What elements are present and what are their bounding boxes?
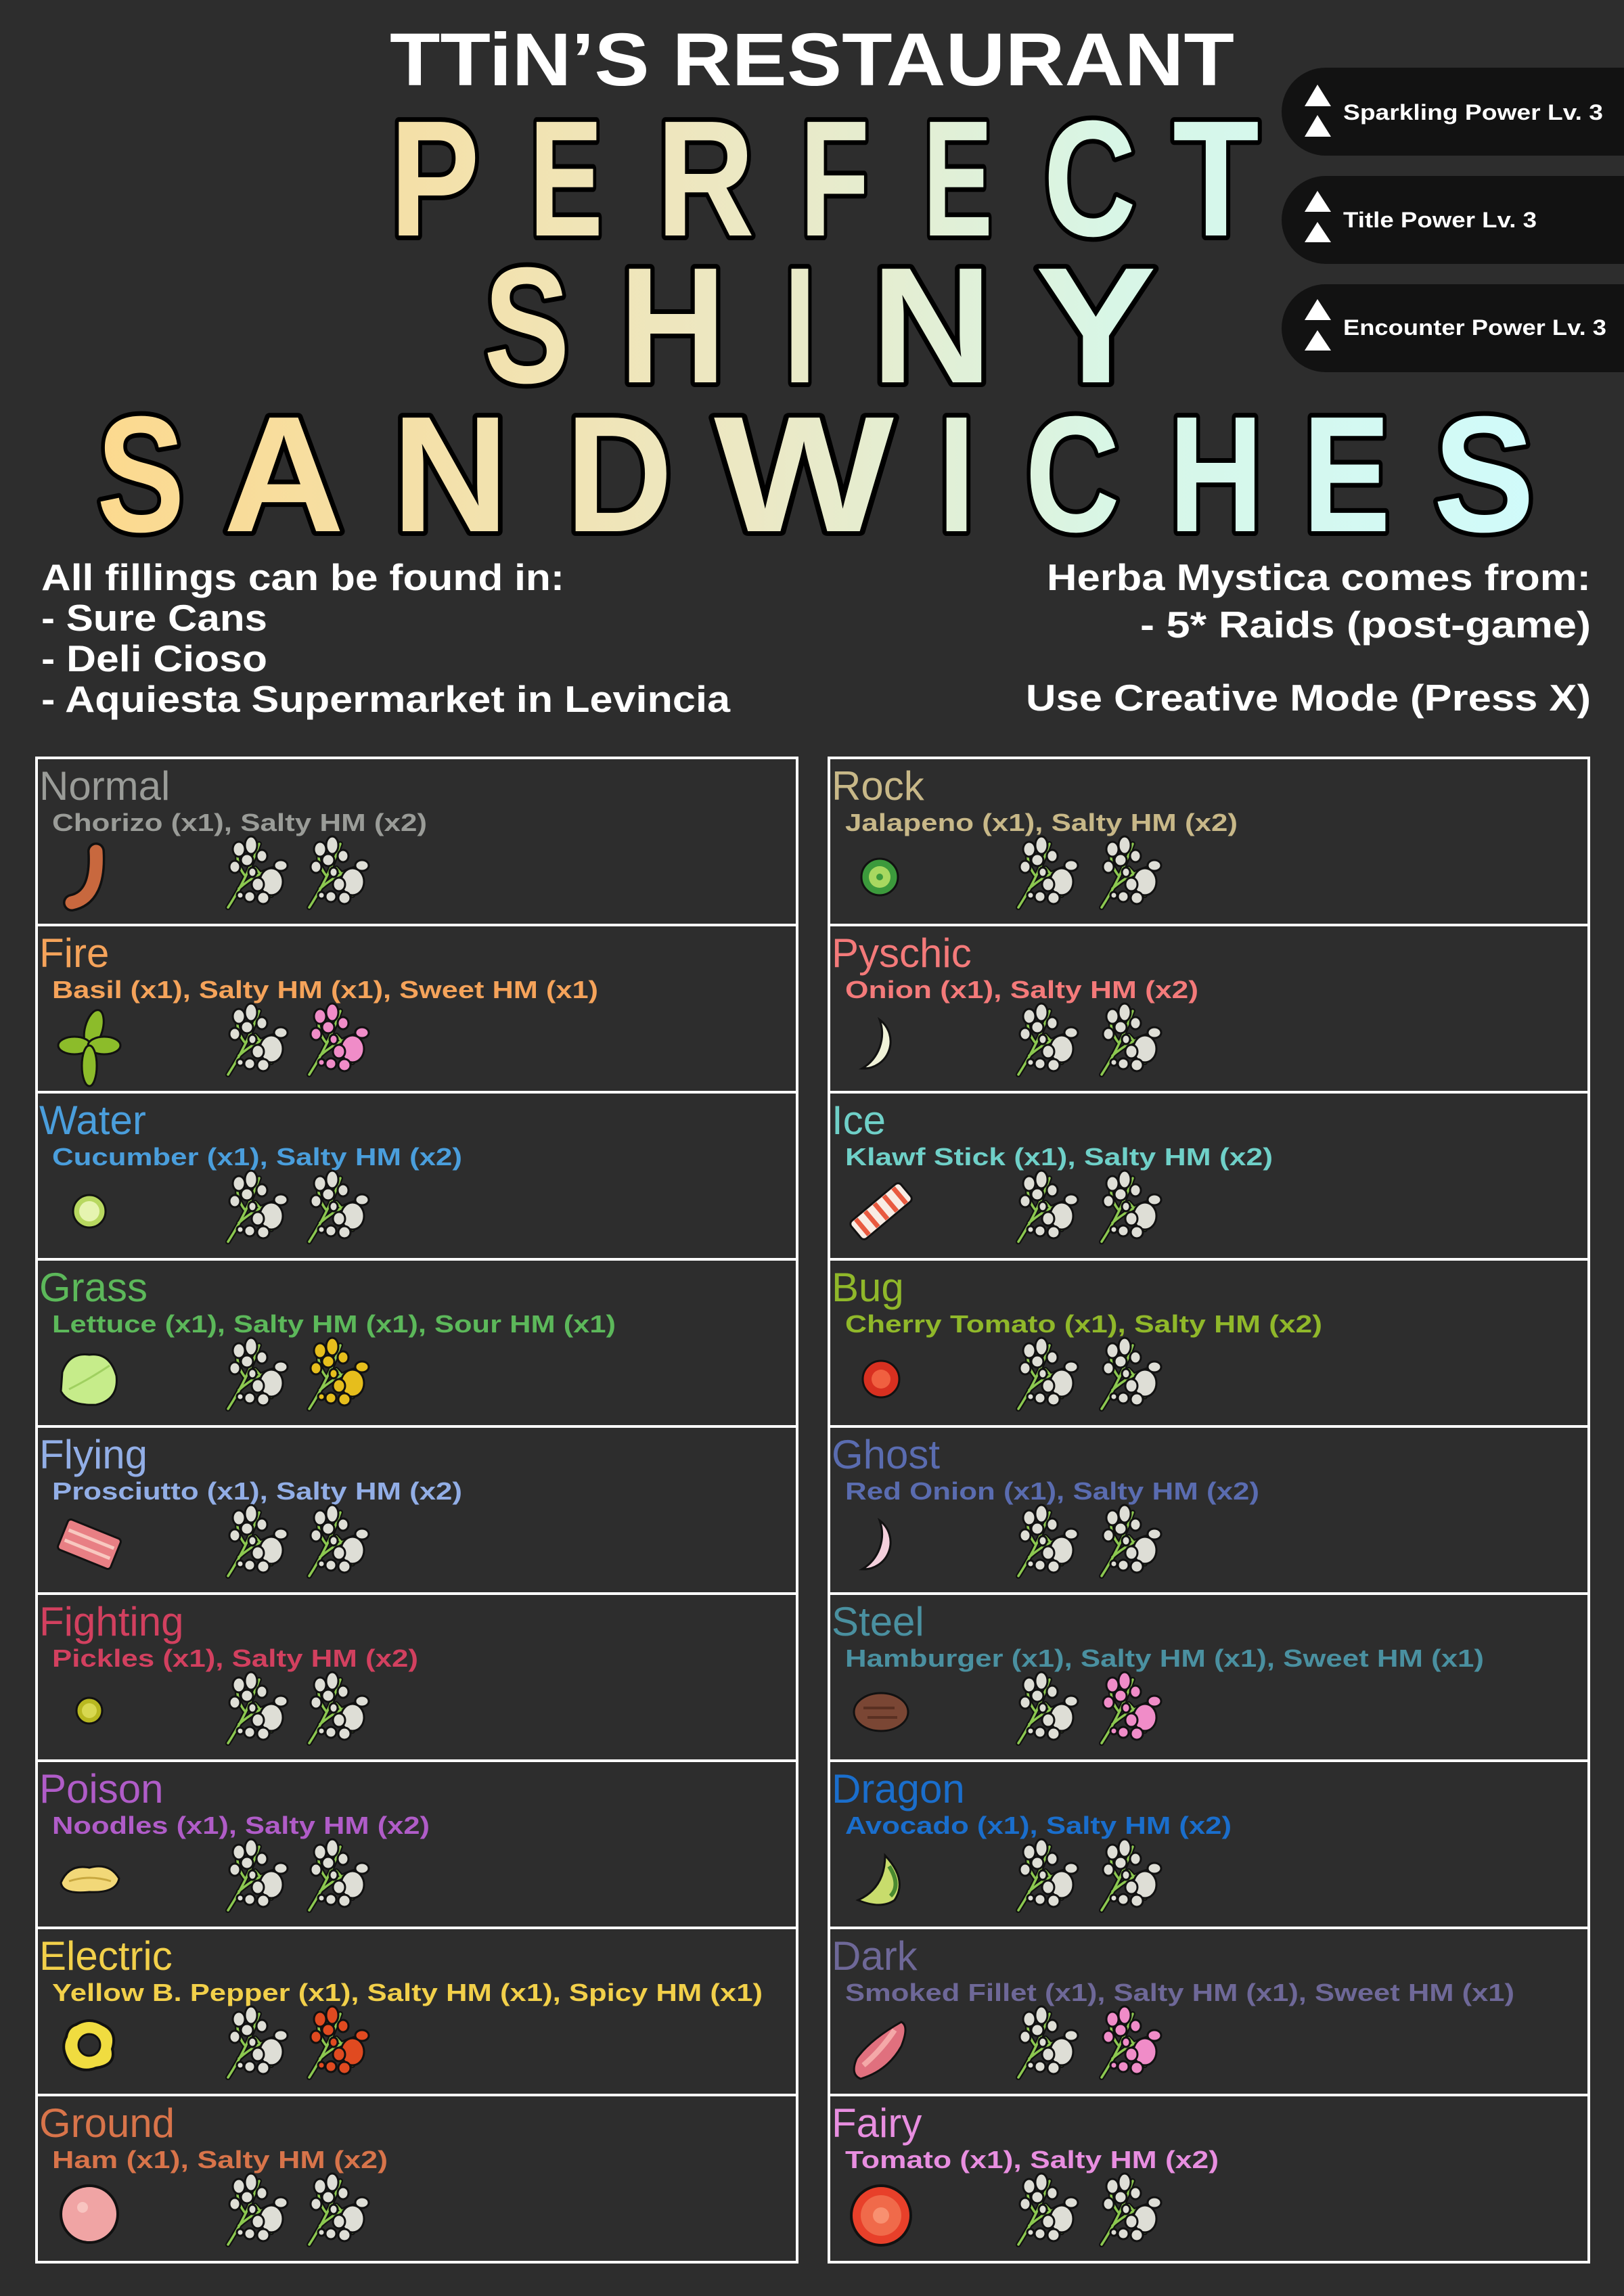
badge: Title Power: Title Power Lv. 3 bbox=[1343, 208, 1537, 232]
row: Psychic bbox=[829, 925, 1589, 1092]
heading: SHINY: H bbox=[619, 233, 726, 418]
text block: fillings locations: - Aquiesta Supermarket in Levincia bbox=[41, 678, 730, 720]
heading: SANDWICHES: H bbox=[1169, 382, 1263, 566]
row: Bug: Cherry Tomato (x1), Salty HM (x2) bbox=[845, 1310, 1322, 1338]
row: Ground: Ham (x1), Salty HM (x2) bbox=[52, 2146, 388, 2174]
row: Ice bbox=[829, 1092, 1589, 1259]
badge: Sparkling Power bbox=[1282, 68, 1624, 156]
heading: SANDWICHES bbox=[97, 382, 1535, 566]
row: Water: Cucumber (x1), Salty HM (x2) bbox=[52, 1143, 462, 1171]
row: Bug bbox=[829, 1259, 1589, 1426]
row: Fighting: Pickles (x1), Salty HM (x2) bbox=[52, 1644, 418, 1672]
badge: Encounter Power bbox=[1282, 284, 1624, 372]
row: Ghost: Ghost bbox=[832, 1432, 940, 1477]
row: Steel bbox=[829, 1594, 1589, 1761]
row: Ice: Ice bbox=[832, 1098, 886, 1143]
row: Flying: Flying bbox=[39, 1432, 148, 1477]
row: Fairy: Tomato (x1), Salty HM (x2) bbox=[845, 2146, 1219, 2174]
row: Rock: Jalapeno (x1), Salty HM (x2) bbox=[845, 809, 1238, 836]
row: Dark: Dark bbox=[832, 1933, 918, 1979]
row: Water: Water bbox=[39, 1098, 146, 1143]
text block: herba mystica source: - 5* Raids (post-game) bbox=[1140, 604, 1591, 646]
heading: SANDWICHES: S bbox=[1433, 382, 1535, 566]
heading: PERFECT: P bbox=[390, 86, 480, 271]
row: Dark: Smoked Fillet (x1), Salty HM (x1), Sweet HM (x1) bbox=[845, 1979, 1514, 2006]
row: Dragon: Avocado (x1), Salty HM (x2) bbox=[845, 1811, 1232, 1839]
row: Water bbox=[37, 1092, 797, 1259]
heading: PERFECT: E bbox=[923, 86, 993, 271]
row: Bug: Bug bbox=[832, 1265, 904, 1310]
heading: PERFECT: E bbox=[529, 86, 603, 271]
panel: right column types bbox=[829, 758, 1589, 2262]
heading: SANDWICHES: S bbox=[97, 382, 185, 566]
row: Flying bbox=[37, 1426, 797, 1594]
row: Flying: Prosciutto (x1), Salty HM (x2) bbox=[52, 1477, 462, 1505]
row: Fairy: Fairy bbox=[832, 2100, 922, 2146]
row: Normal bbox=[37, 758, 797, 925]
row: Psychic: Pyschic bbox=[832, 930, 972, 976]
row: Grass bbox=[37, 1259, 797, 1426]
panel: left column types bbox=[37, 758, 797, 2262]
text block: fillings locations: - Deli Cioso bbox=[41, 637, 267, 679]
heading: SHINY: S bbox=[484, 233, 570, 418]
badge: Sparkling Power: Sparkling Power Lv. 3 bbox=[1343, 100, 1603, 125]
heading: SANDWICHES: D bbox=[566, 382, 673, 566]
row: Steel: Steel bbox=[832, 1599, 924, 1644]
row: Fire bbox=[37, 925, 797, 1092]
text block: fillings locations: All fillings can be found in: bbox=[41, 556, 564, 598]
heading: SHINY: Y bbox=[1035, 233, 1156, 418]
heading: SHINY bbox=[484, 233, 1156, 418]
row: Fighting bbox=[37, 1594, 797, 1761]
row: Normal: Chorizo (x1), Salty HM (x2) bbox=[52, 809, 427, 836]
row: Ice: Klawf Stick (x1), Salty HM (x2) bbox=[845, 1143, 1273, 1171]
title: TTiN'S RESTAURANT: TTiN’S RESTAURANT bbox=[390, 18, 1234, 102]
row: Fighting: Fighting bbox=[39, 1599, 183, 1644]
heading: PERFECT: R bbox=[656, 86, 754, 271]
heading: SANDWICHES: W bbox=[714, 382, 895, 566]
heading: PERFECT: F bbox=[800, 86, 870, 271]
row: Electric: Yellow B. Pepper (x1), Salty HM (x1), Spicy HM (x1) bbox=[52, 1979, 763, 2006]
row: Rock bbox=[829, 758, 1589, 925]
row: Fairy bbox=[829, 2095, 1589, 2262]
row: Poison: Noodles (x1), Salty HM (x2) bbox=[52, 1811, 430, 1839]
heading: PERFECT bbox=[390, 86, 1259, 271]
badge: Encounter Power: Encounter Power Lv. 3 bbox=[1343, 315, 1606, 340]
row: Dragon bbox=[829, 1761, 1589, 1928]
heading: PERFECT: T bbox=[1173, 86, 1259, 271]
row: Ground: Ground bbox=[39, 2100, 175, 2146]
text block: herba mystica source: Herba Mystica comes from: bbox=[1047, 556, 1591, 598]
row: Fire: Fire bbox=[39, 930, 109, 976]
heading: SHINY: I bbox=[784, 233, 816, 418]
text block: herba mystica source: Use Creative Mode (Press X) bbox=[1026, 677, 1591, 719]
badge: Title Power bbox=[1282, 176, 1624, 264]
text block: fillings locations: - Sure Cans bbox=[41, 597, 267, 639]
row: Grass: Lettuce (x1), Salty HM (x1), Sour HM (x1) bbox=[52, 1310, 616, 1338]
row: Fire: Basil (x1), Salty HM (x1), Sweet HM (x1) bbox=[52, 976, 598, 1004]
row: Psychic: Onion (x1), Salty HM (x2) bbox=[845, 976, 1198, 1004]
row: Ghost bbox=[829, 1426, 1589, 1594]
heading: SANDWICHES: C bbox=[1025, 382, 1120, 566]
row: Normal: Normal bbox=[39, 763, 170, 809]
row: Ghost: Red Onion (x1), Salty HM (x2) bbox=[845, 1477, 1259, 1505]
row: Grass: Grass bbox=[39, 1265, 148, 1310]
text block: fillings locations bbox=[41, 556, 730, 720]
row: Ground bbox=[37, 2095, 797, 2262]
heading: SANDWICHES: E bbox=[1303, 382, 1391, 566]
heading: SANDWICHES: I bbox=[937, 382, 976, 566]
text block: herba mystica source bbox=[1026, 556, 1591, 719]
row: Dark bbox=[829, 1928, 1589, 2095]
heading: SANDWICHES: A bbox=[223, 382, 344, 566]
row: Electric bbox=[37, 1928, 797, 2095]
row: Poison: Poison bbox=[39, 1766, 163, 1811]
heading: SHINY: N bbox=[871, 233, 993, 418]
row: Rock: Rock bbox=[832, 763, 925, 809]
row: Dragon: Dragon bbox=[832, 1766, 965, 1811]
heading: PERFECT: C bbox=[1043, 86, 1136, 271]
heading: SANDWICHES: N bbox=[392, 382, 509, 566]
row: Steel: Hamburger (x1), Salty HM (x1), Sweet HM (x1) bbox=[845, 1644, 1484, 1672]
row: Poison bbox=[37, 1761, 797, 1928]
row: Electric: Electric bbox=[39, 1933, 173, 1979]
